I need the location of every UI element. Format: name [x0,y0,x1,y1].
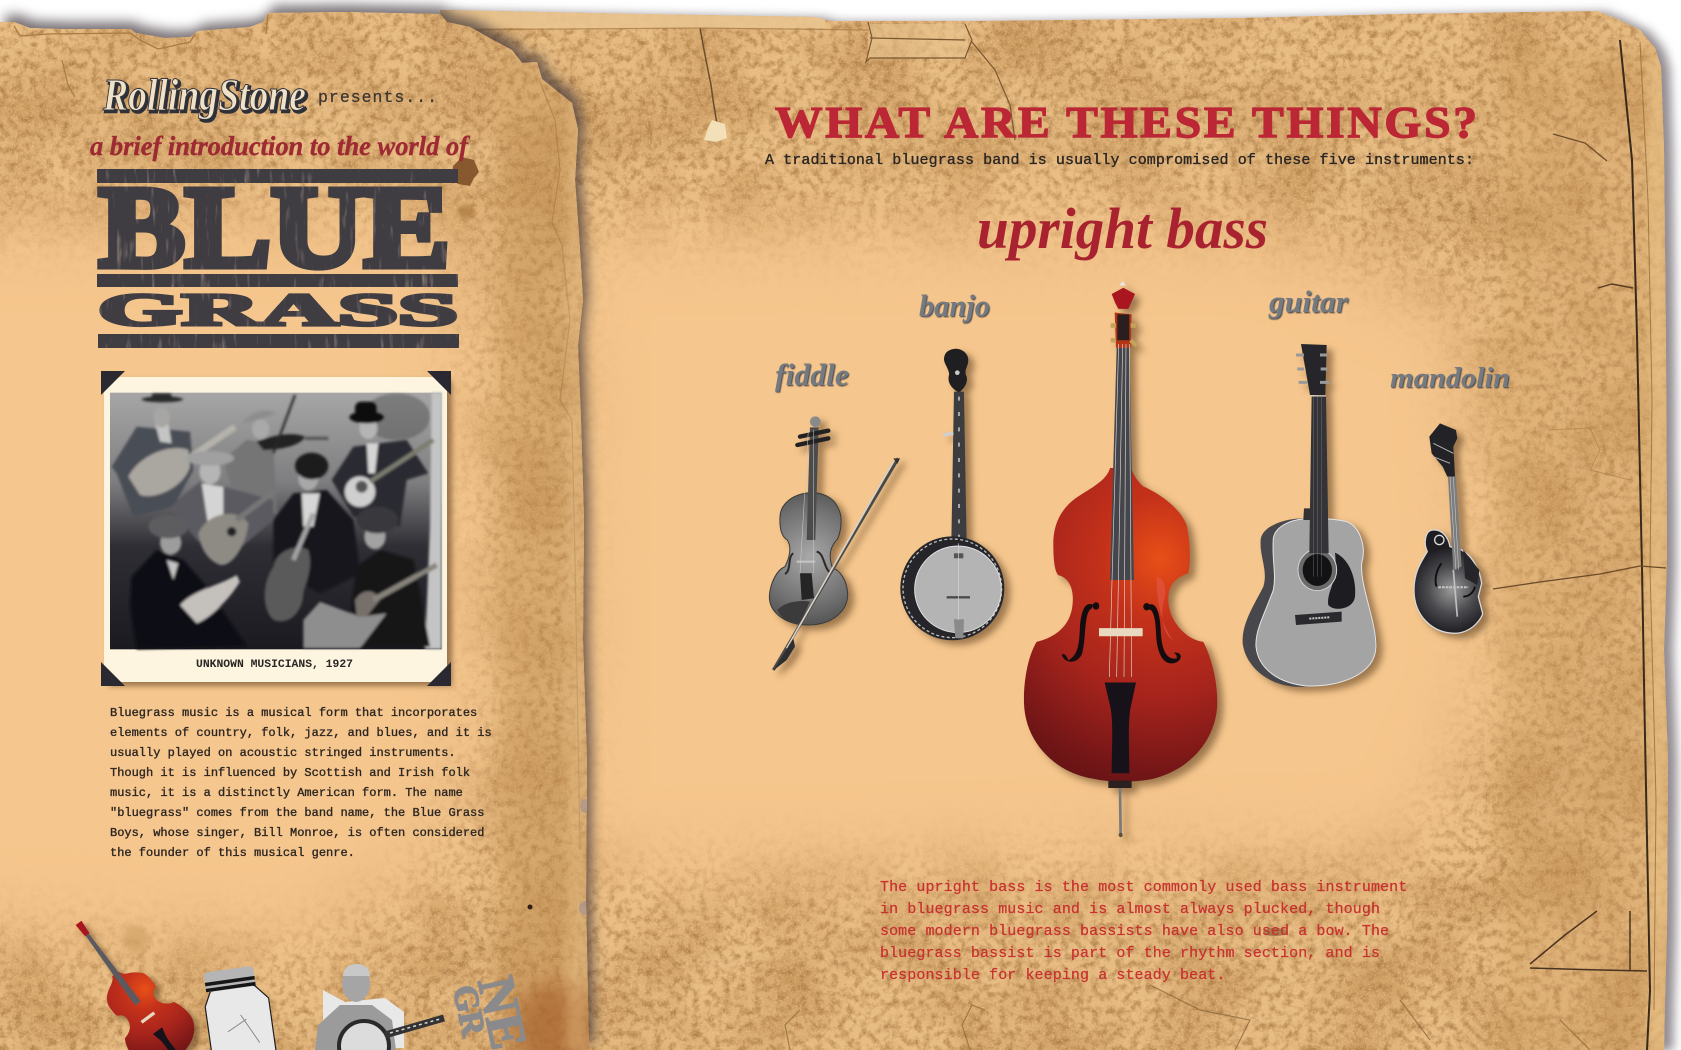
text: intro sentence: A traditional bluegrass band is usually compromised of these five instruments: [765,152,1474,169]
caption: UNKNOWN MUSICIANS, 1927 [196,659,353,671]
right page paper [430,0,1681,1050]
title word: BLUE: BLUE [99,164,450,292]
title word: GRASS: GRASS [98,285,458,335]
text: upright bass description [880,879,1407,984]
text: bluegrass description: Bluegrass music is a musical form that incorporates [110,706,477,720]
icon: fiddle with bow [769,416,900,671]
heading: upright bass: upright bass [977,196,1268,261]
text: presents: presents... [318,88,437,107]
icon: banjo [900,349,1004,640]
text: bluegrass description: the founder of this musical genre. [110,846,355,860]
label: fiddle: fiddle [775,357,849,392]
heading: what are these things: WHAT ARE THESE THINGS? [775,98,1477,147]
text: bluegrass description [110,706,492,860]
icon: guitar [1243,344,1377,687]
text: new grass fragment: GR [445,982,492,1040]
logo: Rolling Stone: RollingStone [104,71,308,122]
text: upright bass description: responsible for keeping a steady beat. [880,967,1225,984]
photo corner: top right [427,371,451,395]
photo [110,393,442,649]
photo corner: bottom left [101,662,125,686]
heading: a brief introduction: a brief introduction to the world of [90,131,471,161]
left page paper [0,0,600,1050]
panel: right page, instruments [430,0,1681,1050]
icon: mason jar [200,964,278,1050]
text: bluegrass description: music, it is a distinctly American form. The name [110,786,463,800]
icon: upright bass [1024,281,1217,837]
text: bluegrass description: "bluegrass" comes from the band name, the Blue Grass [110,806,484,820]
label: mandolin: mandolin [1390,362,1510,394]
logo: Rolling Stone: RollingStone [102,69,306,120]
card [104,377,447,682]
title: Blue Grass wood type [97,164,459,348]
icon: mandolin [1414,423,1483,633]
text: bluegrass description: elements of country, folk, jazz, and blues, and it is [110,726,492,740]
photo corner: top left [101,371,125,395]
text: bluegrass description: Though it is influenced by Scottish and Irish folk [110,766,470,780]
text: upright bass description: some modern bluegrass bassists have also used a bow. The [880,923,1389,940]
title bar middle [97,274,458,287]
text: upright bass description: in bluegrass music and is almost always plucked, though [880,901,1380,918]
text: bluegrass description: usually played on acoustic stringed instruments. [110,746,456,760]
text: bluegrass description: Boys, whose singer, Bill Monroe, is often considered [110,826,484,840]
text: upright bass description: The upright bass is the most commonly used bass instrument [880,879,1407,896]
icon: banjo player [315,964,444,1050]
label: guitar: guitar [1268,284,1349,319]
photo card: unknown musicians [101,371,451,686]
text: upright bass description: bluegrass bassist is part of the rhythm section, and is [880,945,1380,962]
icon: small upright bass [49,902,205,1050]
photo corner: bottom right [427,662,451,686]
label: banjo: banjo [919,288,990,323]
title bar bottom [98,334,459,348]
title bar top [97,169,458,183]
panel: left page, bluegrass introduction [0,0,600,1050]
